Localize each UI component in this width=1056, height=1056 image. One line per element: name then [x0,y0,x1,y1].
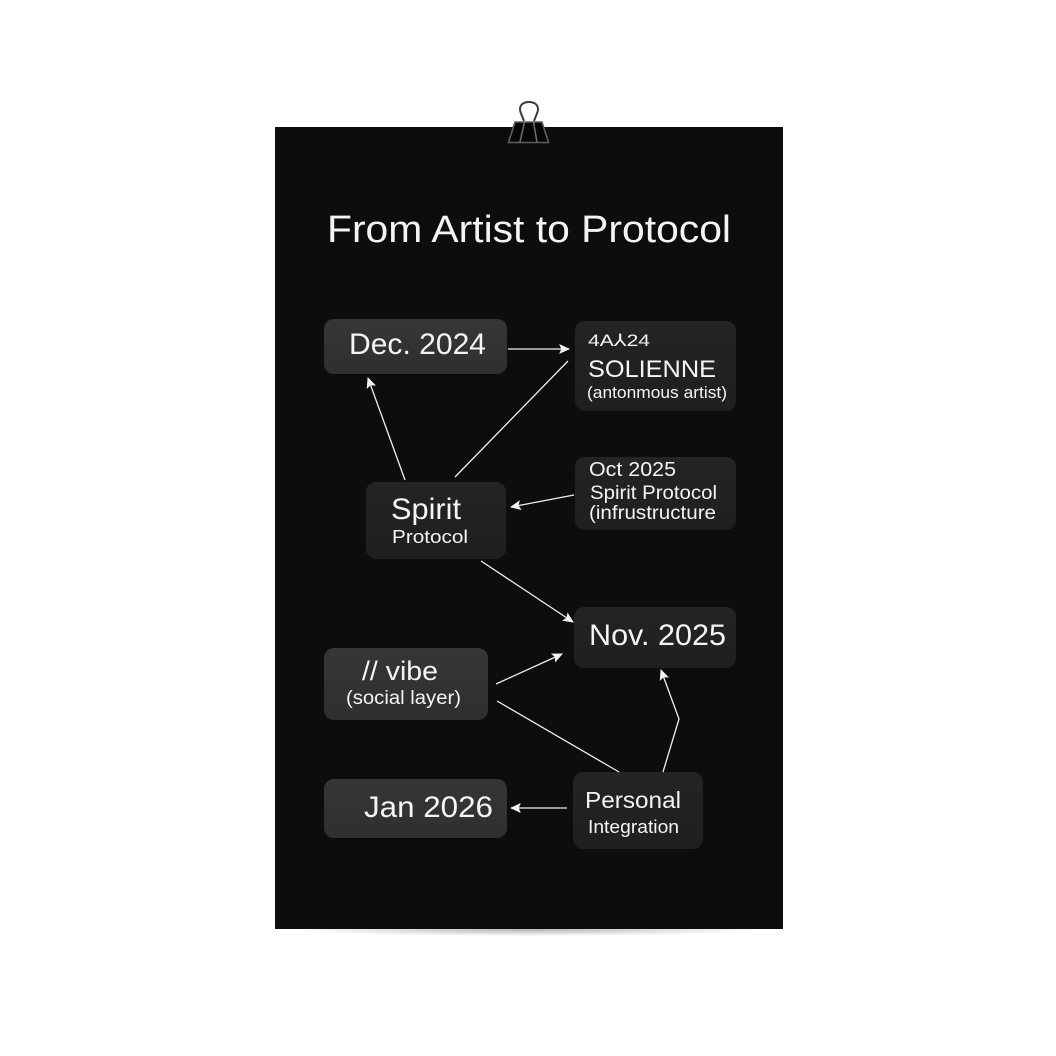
node: Nov. 2025 [574,607,736,668]
icon: binder clip [508,102,548,142]
arrow: Spirit to Nov 2025 [481,561,573,622]
node: SOLIENNE: 4A⅄24 [588,331,650,350]
arrow: vibe to Nov 2025 [496,654,562,684]
arrow: Personal to Nov 2025 [661,670,679,772]
node: Oct 2025 Spirit Protocol: (infrustructure [589,503,716,524]
node: Oct 2025 Spirit Protocol: Spirit Protocol [590,483,717,504]
title: From Artist to Protocol [327,209,731,251]
node: vibe social layer: (social layer) [346,688,461,709]
node: Jan 2026: Jan 2026 [364,791,493,824]
node: Oct 2025 Spirit Protocol: Oct 2025 [589,459,676,481]
node: vibe social layer: // vibe [362,656,438,686]
node: Dec. 2024 [324,319,507,374]
line: vibe to Personal [497,701,619,772]
node: Spirit Protocol: Spirit [391,493,462,526]
node: Spirit Protocol [366,482,506,559]
arrow: Spirit to SOLIENNE [455,361,568,477]
poster shadow [293,924,763,936]
node: vibe social layer [324,648,488,720]
arrow: Dec 2024 to SOLIENNE [508,348,569,350]
arrow: Oct 2025 to Spirit [511,495,574,507]
node: SOLIENNE: SOLIENNE [588,356,716,383]
node: Dec. 2024: Dec. 2024 [349,328,486,361]
node: Personal Integration: Integration [588,817,679,837]
poster background [275,127,783,929]
arrows [368,349,679,808]
node: Personal Integration [573,772,703,849]
arrow: Spirit to Dec 2024 [368,378,405,480]
node: Jan 2026 [324,779,507,838]
node: Oct 2025 Spirit Protocol [575,457,736,530]
node: SOLIENNE: (antonmous artist) [587,383,727,402]
node: Personal Integration: Personal [585,787,681,813]
node: Nov. 2025: Nov. 2025 [589,619,726,652]
node: Spirit Protocol: Protocol [392,527,468,547]
node: SOLIENNE [575,321,736,411]
arrow: Personal to Jan 2026 [511,807,567,809]
